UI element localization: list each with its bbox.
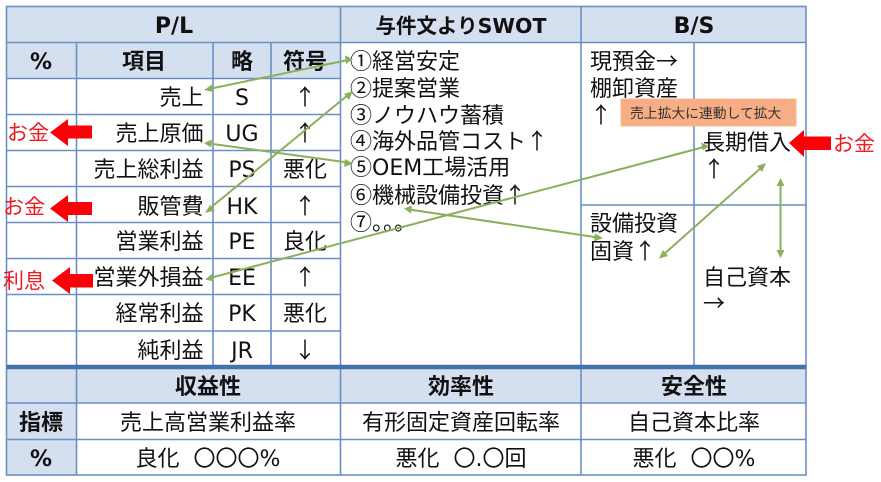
indicator names: 売上高営業利益率 [120, 411, 296, 436]
P/L abbreviations: PS [228, 158, 256, 183]
P/L item names: 販管費 [137, 195, 204, 220]
P/L abbreviations [225, 86, 259, 364]
P/L item names: 純利益 [137, 339, 204, 364]
indicator values: 悪化 〇.〇回 [396, 447, 526, 472]
red arrow: money from cost of sales [7, 117, 92, 147]
indicator values [136, 447, 755, 472]
red arrow: interest: 利息 [3, 265, 45, 295]
callout: expands with sales: 売上拡大に連動して拡大 [630, 102, 782, 122]
heading: P/L: P/L [155, 14, 193, 39]
heading: SWOT from the case text: 与件文よりSWOT [376, 14, 546, 38]
red arrow: money from SG&A [3, 191, 92, 222]
P/L abbreviations: PE [228, 230, 256, 255]
P/L abbreviations: EE [228, 266, 256, 291]
P/L column headers: % [30, 50, 52, 75]
SWOT list: ⑥機械設備投資↑ [350, 178, 526, 210]
indicator values: 良化 〇〇〇% [136, 447, 280, 472]
callout: expands with sales [621, 99, 796, 126]
SWOT list: ②提案営業 [350, 71, 460, 103]
P/L abbreviations: S [235, 86, 249, 111]
P/L column headers: 符号 [283, 50, 327, 75]
P/L signs: ↑ [294, 189, 316, 221]
P/L signs: ↑ [294, 260, 316, 292]
P/L item names: 売上総利益 [93, 158, 204, 183]
P/L abbreviations: HK [227, 195, 258, 220]
B/S assets: ↑ [590, 98, 612, 130]
B/S liabilities and equity: → [703, 286, 725, 318]
B/S liabilities and equity: 長期借入 [703, 125, 791, 157]
heading: B/S: B/S [674, 14, 714, 39]
P/L column headers: 略 [231, 50, 253, 75]
indicator values: 悪化 〇〇% [633, 447, 755, 472]
P/L signs: 悪化 [283, 158, 327, 183]
P/L signs: 良化 [283, 230, 327, 255]
red arrow: money from cost of sales: お金 [7, 117, 49, 147]
B/S assets: 固資↑ [590, 234, 656, 266]
indicator headings: 収益性 [175, 375, 241, 400]
P/L abbreviations: UG [225, 122, 259, 147]
P/L signs: 悪化 [283, 302, 327, 327]
B/S assets: 棚卸資産 [590, 71, 678, 103]
P/L signs: ↑ [294, 116, 316, 148]
indicator names: 自己資本比率 [628, 411, 760, 436]
red arrow: money from SG&A: お金 [3, 191, 45, 221]
P/L item names: 営業利益 [115, 230, 204, 255]
P/L column headers [30, 50, 327, 75]
red arrow: money into long-term debt [789, 128, 875, 158]
P/L signs: ↓ [294, 333, 316, 365]
SWOT list: ⑤OEM工場活用 [350, 150, 510, 182]
indicator names: 有形固定資産回転率 [362, 411, 560, 436]
B/S liabilities and equity [703, 125, 791, 318]
P/L item names: 営業外損益 [93, 266, 204, 291]
P/L abbreviations: PK [228, 302, 256, 327]
SWOT list: ④海外品管コスト↑ [350, 124, 548, 156]
indicator row label: 指標 [19, 411, 63, 436]
P/L item names: 売上 [159, 86, 204, 111]
P/L item names: 経常利益 [115, 302, 204, 327]
SWOT list [350, 44, 548, 237]
B/S assets [590, 44, 678, 266]
P/L abbreviations: JR [229, 339, 253, 364]
P/L signs: ↑ [294, 80, 316, 112]
percent row label: % [30, 447, 52, 472]
indicator names [120, 411, 760, 436]
P/L item names [93, 86, 204, 364]
red arrow: money into long-term debt: お金 [833, 128, 875, 158]
SWOT list: ①経営安定 [350, 44, 460, 76]
red arrow: interest [3, 265, 93, 295]
P/L column headers: 項目 [122, 50, 166, 75]
B/S assets: 設備投資 [590, 206, 678, 238]
indicator headings: 安全性 [661, 375, 727, 400]
B/S liabilities and equity: ↑ [703, 152, 725, 184]
P/L signs [283, 80, 327, 365]
P/L item names: 売上原価 [115, 122, 204, 147]
B/S liabilities and equity: 自己資本 [703, 260, 791, 292]
SWOT list: ⑦。。。 [350, 205, 416, 237]
indicator headings [175, 375, 727, 400]
indicator headings: 効率性 [428, 375, 494, 400]
SWOT list: ③ノウハウ蓄積 [350, 98, 504, 130]
green link arrows [204, 56, 784, 282]
B/S assets: 現預金→ [590, 44, 678, 76]
